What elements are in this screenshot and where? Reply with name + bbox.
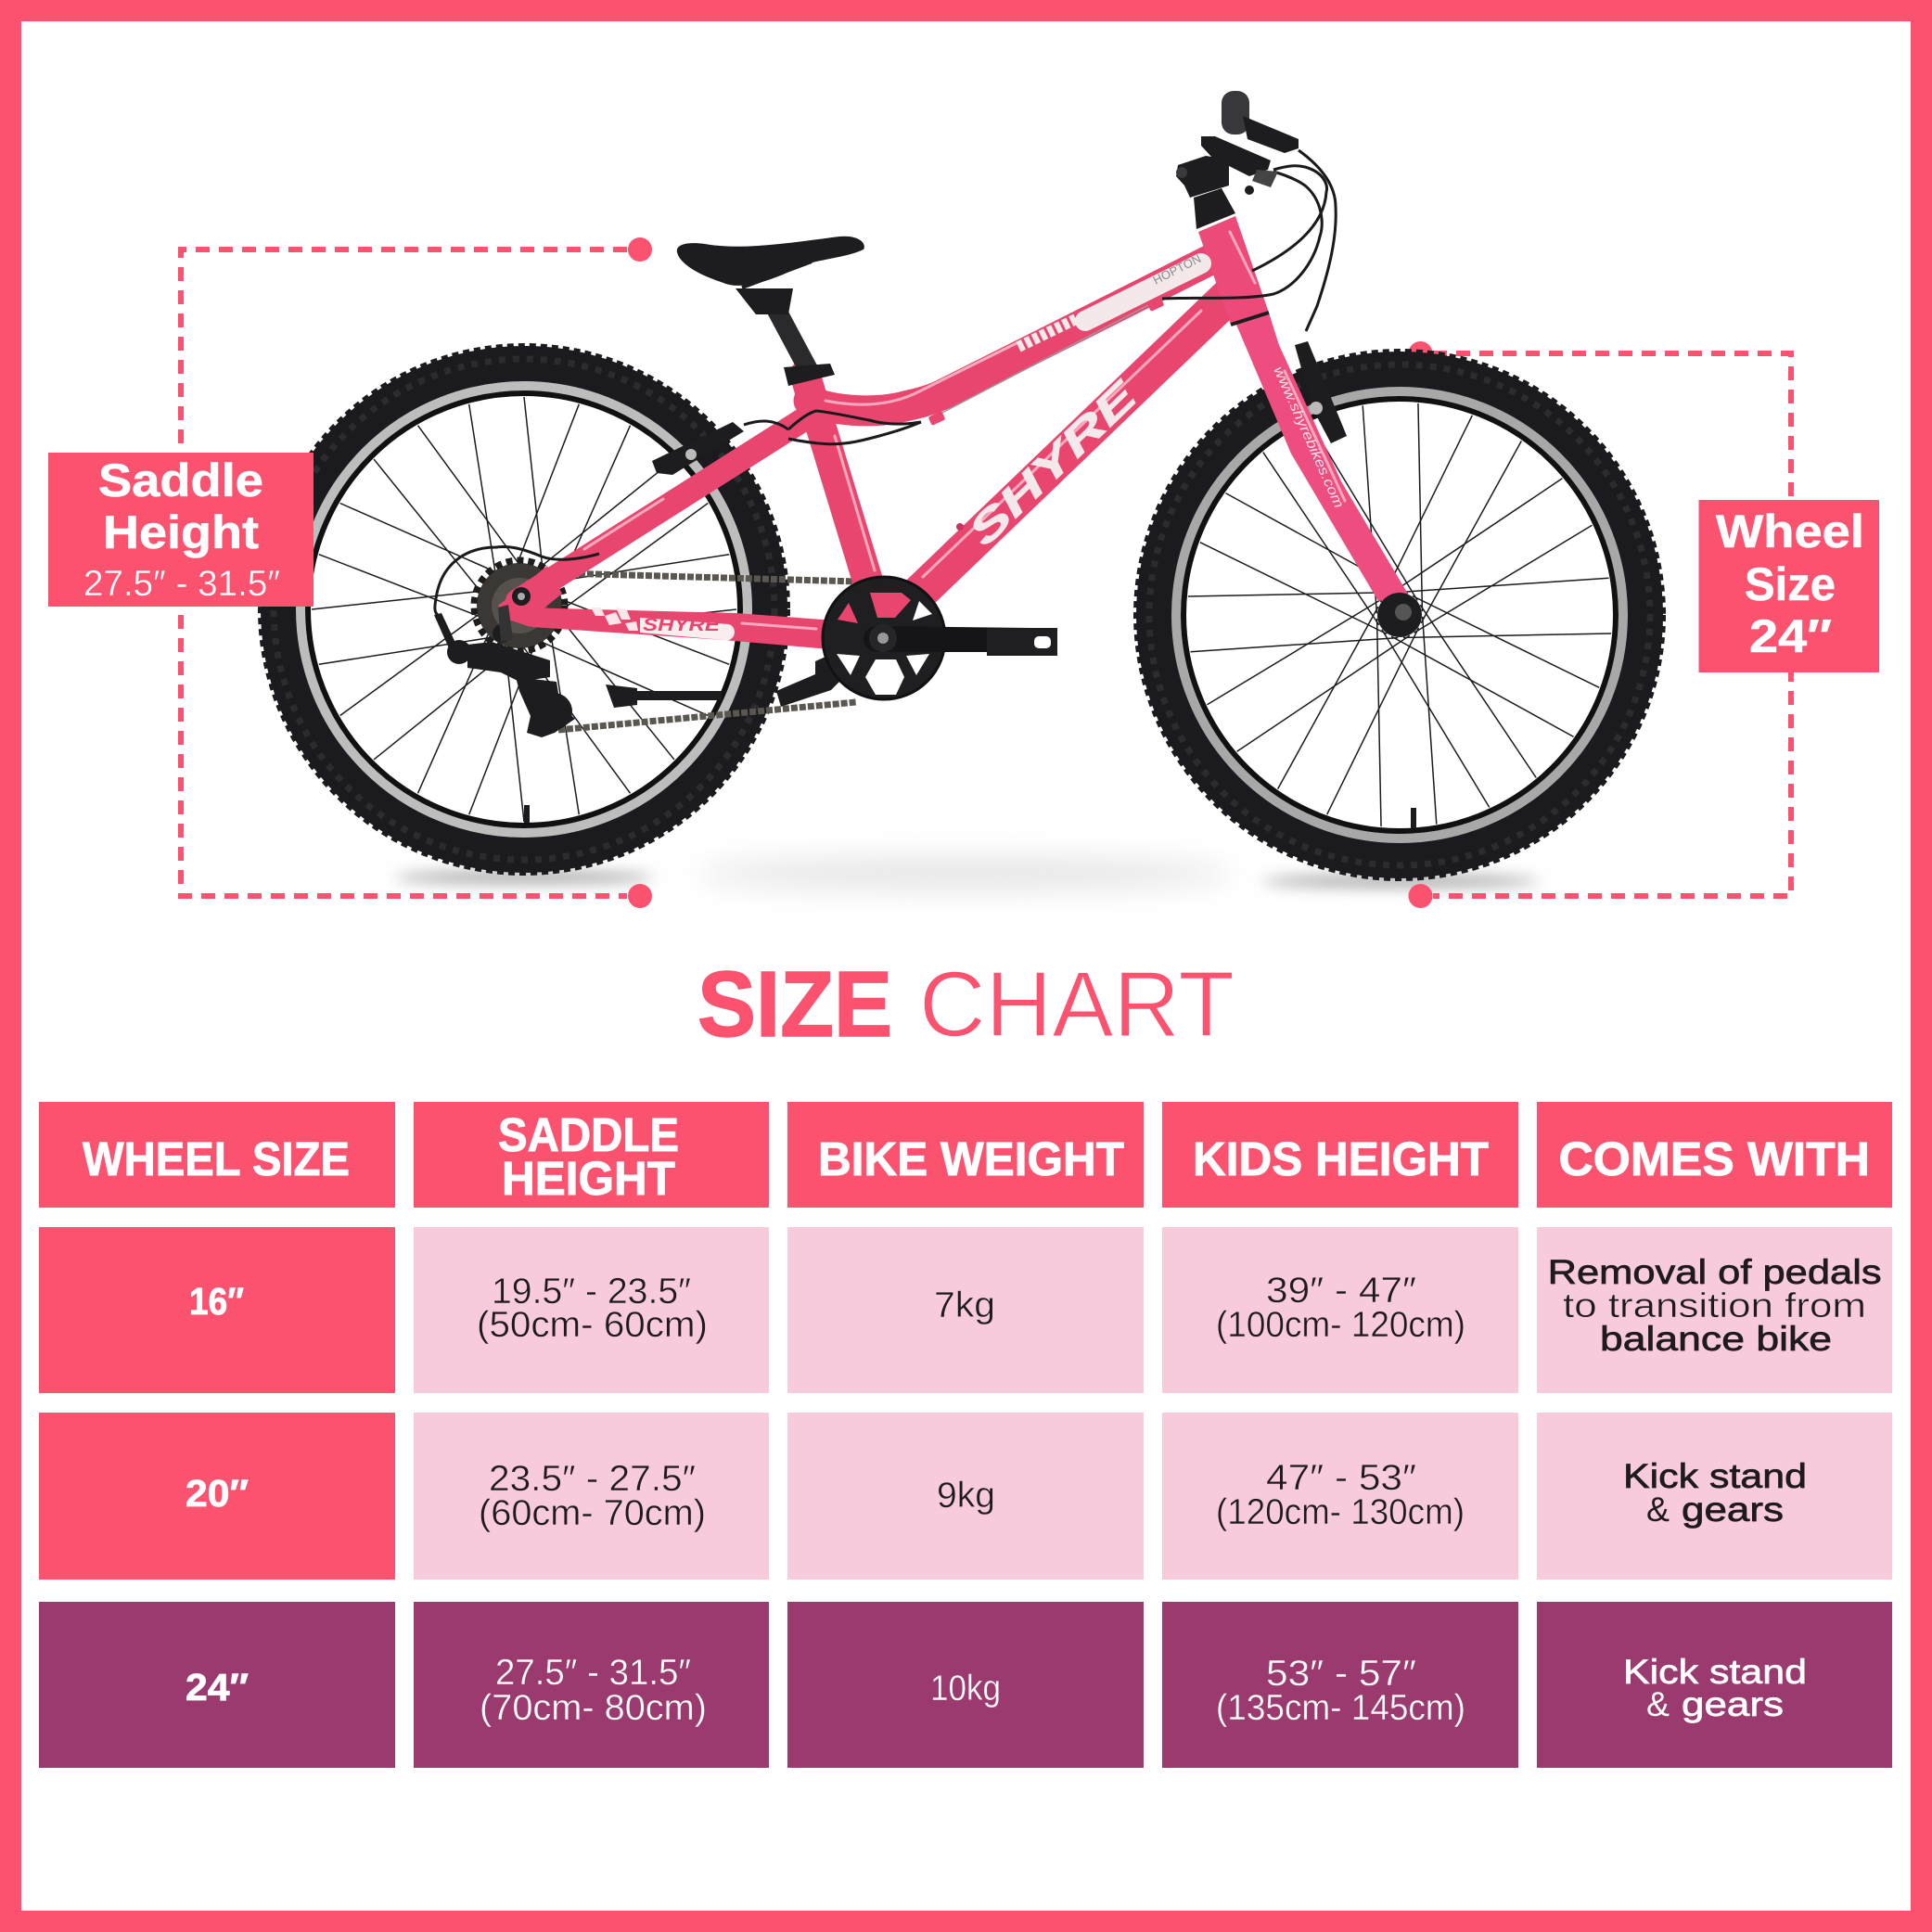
cell: 16 comes with: to transition from	[1563, 1286, 1866, 1324]
down tube brand: SHYRE	[960, 372, 1147, 555]
cell: 16 saddle height: 19.5″ - 23.5″	[492, 1272, 691, 1311]
cell: 20 comes with: gears	[1682, 1491, 1784, 1529]
header: saddle height	[414, 1102, 769, 1208]
top tube	[809, 260, 1210, 411]
rear dropout	[498, 566, 562, 627]
callout: wheel size: Size	[1745, 558, 1836, 610]
cell: 20 saddle height: 23.5″ - 27.5″	[489, 1459, 696, 1499]
front brake	[1295, 341, 1347, 443]
callout: saddle height: Saddle	[98, 454, 263, 506]
cell: 20 kids height	[1162, 1413, 1518, 1580]
cell: 24 kids height: 53″ - 57″	[1266, 1654, 1416, 1694]
seat post	[774, 306, 835, 386]
cell: 20 bike weight: 9kg	[937, 1476, 995, 1516]
title: SIZE	[697, 953, 892, 1056]
kickstand	[606, 657, 839, 708]
header: comes with: COMES WITH	[1558, 1132, 1870, 1185]
stem and handlebar	[1176, 91, 1299, 229]
head tube	[1198, 216, 1269, 325]
cell: 24 wheel size	[39, 1602, 395, 1768]
cell: 16 bike weight: 7kg	[934, 1286, 995, 1325]
cell: 24 saddle height	[414, 1602, 769, 1768]
cell: 24 comes with: Kick stand	[1623, 1653, 1807, 1691]
cell: 24 comes with: gears	[1682, 1685, 1784, 1723]
cell: 24 bike weight	[787, 1602, 1144, 1768]
cell: 16 wheel size: 16″	[189, 1280, 244, 1323]
chain stay decal: SHYRE	[643, 616, 722, 635]
cell: 20 wheel size	[39, 1413, 395, 1580]
rear brake	[652, 422, 744, 475]
callout: wheel size: 24″	[1749, 610, 1832, 662]
cell: 16 comes with	[1537, 1227, 1892, 1393]
front wheel	[1136, 352, 1663, 878]
cell: 16 comes with: Removal of pedals	[1548, 1253, 1882, 1291]
seat tube	[805, 375, 886, 640]
callout: saddle height	[48, 453, 313, 607]
cell: 16 kids height: (100cm- 120cm)	[1216, 1305, 1465, 1345]
row: 20 inch	[39, 1413, 1892, 1580]
bicycle illustration	[261, 91, 1663, 878]
chain	[558, 573, 856, 730]
rear wheel	[261, 346, 787, 873]
header: wheel size	[39, 1102, 395, 1208]
cell: 24 bike weight: 10kg	[930, 1669, 1001, 1708]
frame highlights	[584, 232, 1345, 629]
cell: 24 comes with: &	[1646, 1685, 1670, 1723]
cassette	[474, 560, 565, 651]
header: comes with	[1537, 1102, 1892, 1208]
table header	[39, 1102, 1892, 1208]
down tube bolts	[956, 523, 964, 531]
cell: 16 saddle height	[414, 1227, 769, 1393]
cell: 16 wheel size	[39, 1227, 395, 1393]
seat stay	[518, 417, 807, 601]
cell: 20 saddle height	[414, 1413, 769, 1580]
wheel size dashed guide	[1408, 341, 1791, 908]
cell: 24 kids height: (135cm- 145cm)	[1216, 1688, 1465, 1728]
cell: 16 bike weight	[787, 1227, 1144, 1393]
cell: 24 wheel size: 24″	[186, 1666, 249, 1708]
header: bike weight	[787, 1102, 1144, 1208]
cell: 20 comes with	[1537, 1413, 1892, 1580]
chain stay	[524, 608, 890, 654]
cell: 24 saddle height: (70cm- 80cm)	[480, 1688, 707, 1728]
cell: 16 kids height	[1162, 1227, 1518, 1393]
cell: 16 comes with: balance bike	[1600, 1320, 1832, 1358]
size table	[39, 1102, 1892, 1768]
head tube collar	[1231, 313, 1269, 325]
chain stay decal	[591, 608, 735, 641]
callout: wheel size: Wheel	[1716, 505, 1864, 557]
top tube white band: HOPTON	[1151, 251, 1203, 288]
cell: 24 comes with	[1537, 1602, 1892, 1768]
header: wheel size: WHEEL SIZE	[83, 1132, 350, 1185]
callout: saddle height: Height	[103, 506, 259, 558]
chainring and crank	[823, 577, 1057, 699]
saddle height dashed guide	[181, 237, 652, 908]
title	[697, 953, 1235, 1056]
top tube white band	[928, 251, 1203, 426]
header: kids height	[1162, 1102, 1518, 1208]
header: bike weight: BIKE WEIGHT	[818, 1132, 1124, 1185]
row: 16 inch	[39, 1227, 1892, 1393]
fork url: www.shyrebikes.com	[1270, 365, 1347, 510]
header: saddle height: HEIGHT	[502, 1152, 675, 1205]
cell: 16 kids height: 39″ - 47″	[1266, 1271, 1416, 1311]
frame	[498, 216, 1409, 654]
cell: 20 comes with: &	[1646, 1491, 1670, 1529]
cell: 20 bike weight	[787, 1413, 1144, 1580]
cell: 24 saddle height: 27.5″ - 31.5″	[495, 1653, 691, 1693]
title: CHART	[919, 953, 1235, 1056]
cell: 24 kids height	[1162, 1602, 1518, 1768]
callout: wheel size	[1699, 500, 1879, 672]
front hub	[1377, 593, 1422, 637]
header: kids height: KIDS HEIGHT	[1193, 1132, 1489, 1185]
cell: 20 wheel size: 20″	[186, 1472, 249, 1515]
rear derailleur	[434, 587, 575, 737]
cell: 20 kids height: 47″ - 53″	[1266, 1458, 1416, 1498]
ground shadow	[394, 859, 1540, 889]
fork	[1236, 313, 1409, 601]
header: saddle height: SADDLE	[498, 1108, 679, 1161]
cell: 20 comes with: Kick stand	[1623, 1457, 1807, 1495]
cables	[435, 150, 1336, 615]
cell: 20 saddle height: (60cm- 70cm)	[479, 1493, 706, 1533]
callout: saddle height: 27.5″ - 31.5″	[83, 564, 280, 604]
saddle	[677, 237, 864, 314]
down tube	[886, 291, 1234, 625]
cell: 16 saddle height: (50cm- 60cm)	[477, 1305, 708, 1345]
cell: 20 kids height: (120cm- 130cm)	[1216, 1492, 1465, 1532]
row: 24 inch	[39, 1602, 1892, 1768]
